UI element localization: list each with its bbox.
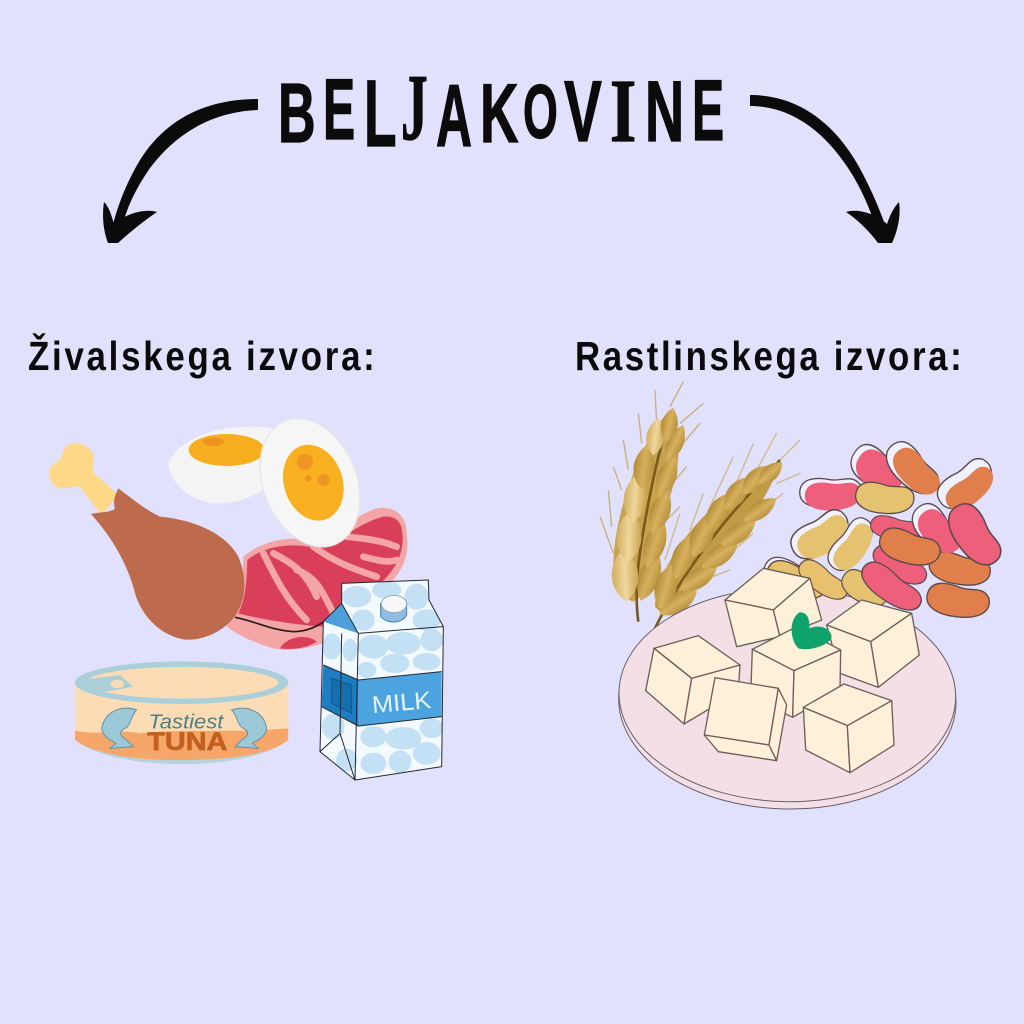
tuna label text: Tastiest [148, 710, 225, 733]
carton cap [381, 595, 407, 622]
milk label: MILK [371, 687, 432, 719]
title [278, 55, 724, 167]
icon: wheat left [600, 382, 703, 622]
arrow: right [750, 95, 900, 243]
title: J [401, 55, 428, 160]
icon: wheat right [650, 433, 800, 632]
title: N [645, 64, 684, 160]
title: A [436, 67, 472, 166]
panel: animal foods [49, 403, 443, 780]
tofu cube center [751, 627, 841, 717]
tofu cube left [646, 636, 740, 724]
icon: plate [617, 585, 958, 812]
tofu cube front right [803, 684, 894, 773]
tofu cube right [827, 600, 919, 687]
title: L [364, 61, 397, 167]
tofu cube front left [704, 678, 787, 761]
title: I [610, 62, 636, 161]
title: K [480, 67, 519, 160]
heading: plant sources: Rastlinskega izvora: [575, 334, 962, 380]
title: E [692, 62, 724, 159]
arrow: left [103, 99, 258, 243]
icon: egg half back [168, 427, 273, 503]
icon: tuna can [73, 661, 290, 767]
title: V [564, 64, 602, 160]
title: O [523, 71, 558, 155]
heading: animal sources: Živalskega izvora: [28, 332, 375, 380]
icon: steak [227, 508, 407, 650]
icon: fish left [102, 708, 137, 748]
title: E [323, 61, 355, 158]
title: B [278, 66, 316, 160]
icon: fish right [232, 708, 267, 748]
panel: plant foods [600, 382, 1008, 812]
icon: green leaf [792, 612, 832, 649]
icon: tuna can: TUNA [147, 728, 227, 756]
icon: chicken drumstick [49, 443, 244, 640]
icon: tofu cubes [646, 568, 919, 773]
tofu cube back [725, 568, 822, 647]
icon: egg half front [242, 403, 378, 562]
icon: milk carton [320, 580, 443, 780]
icon: beans [759, 436, 1008, 621]
